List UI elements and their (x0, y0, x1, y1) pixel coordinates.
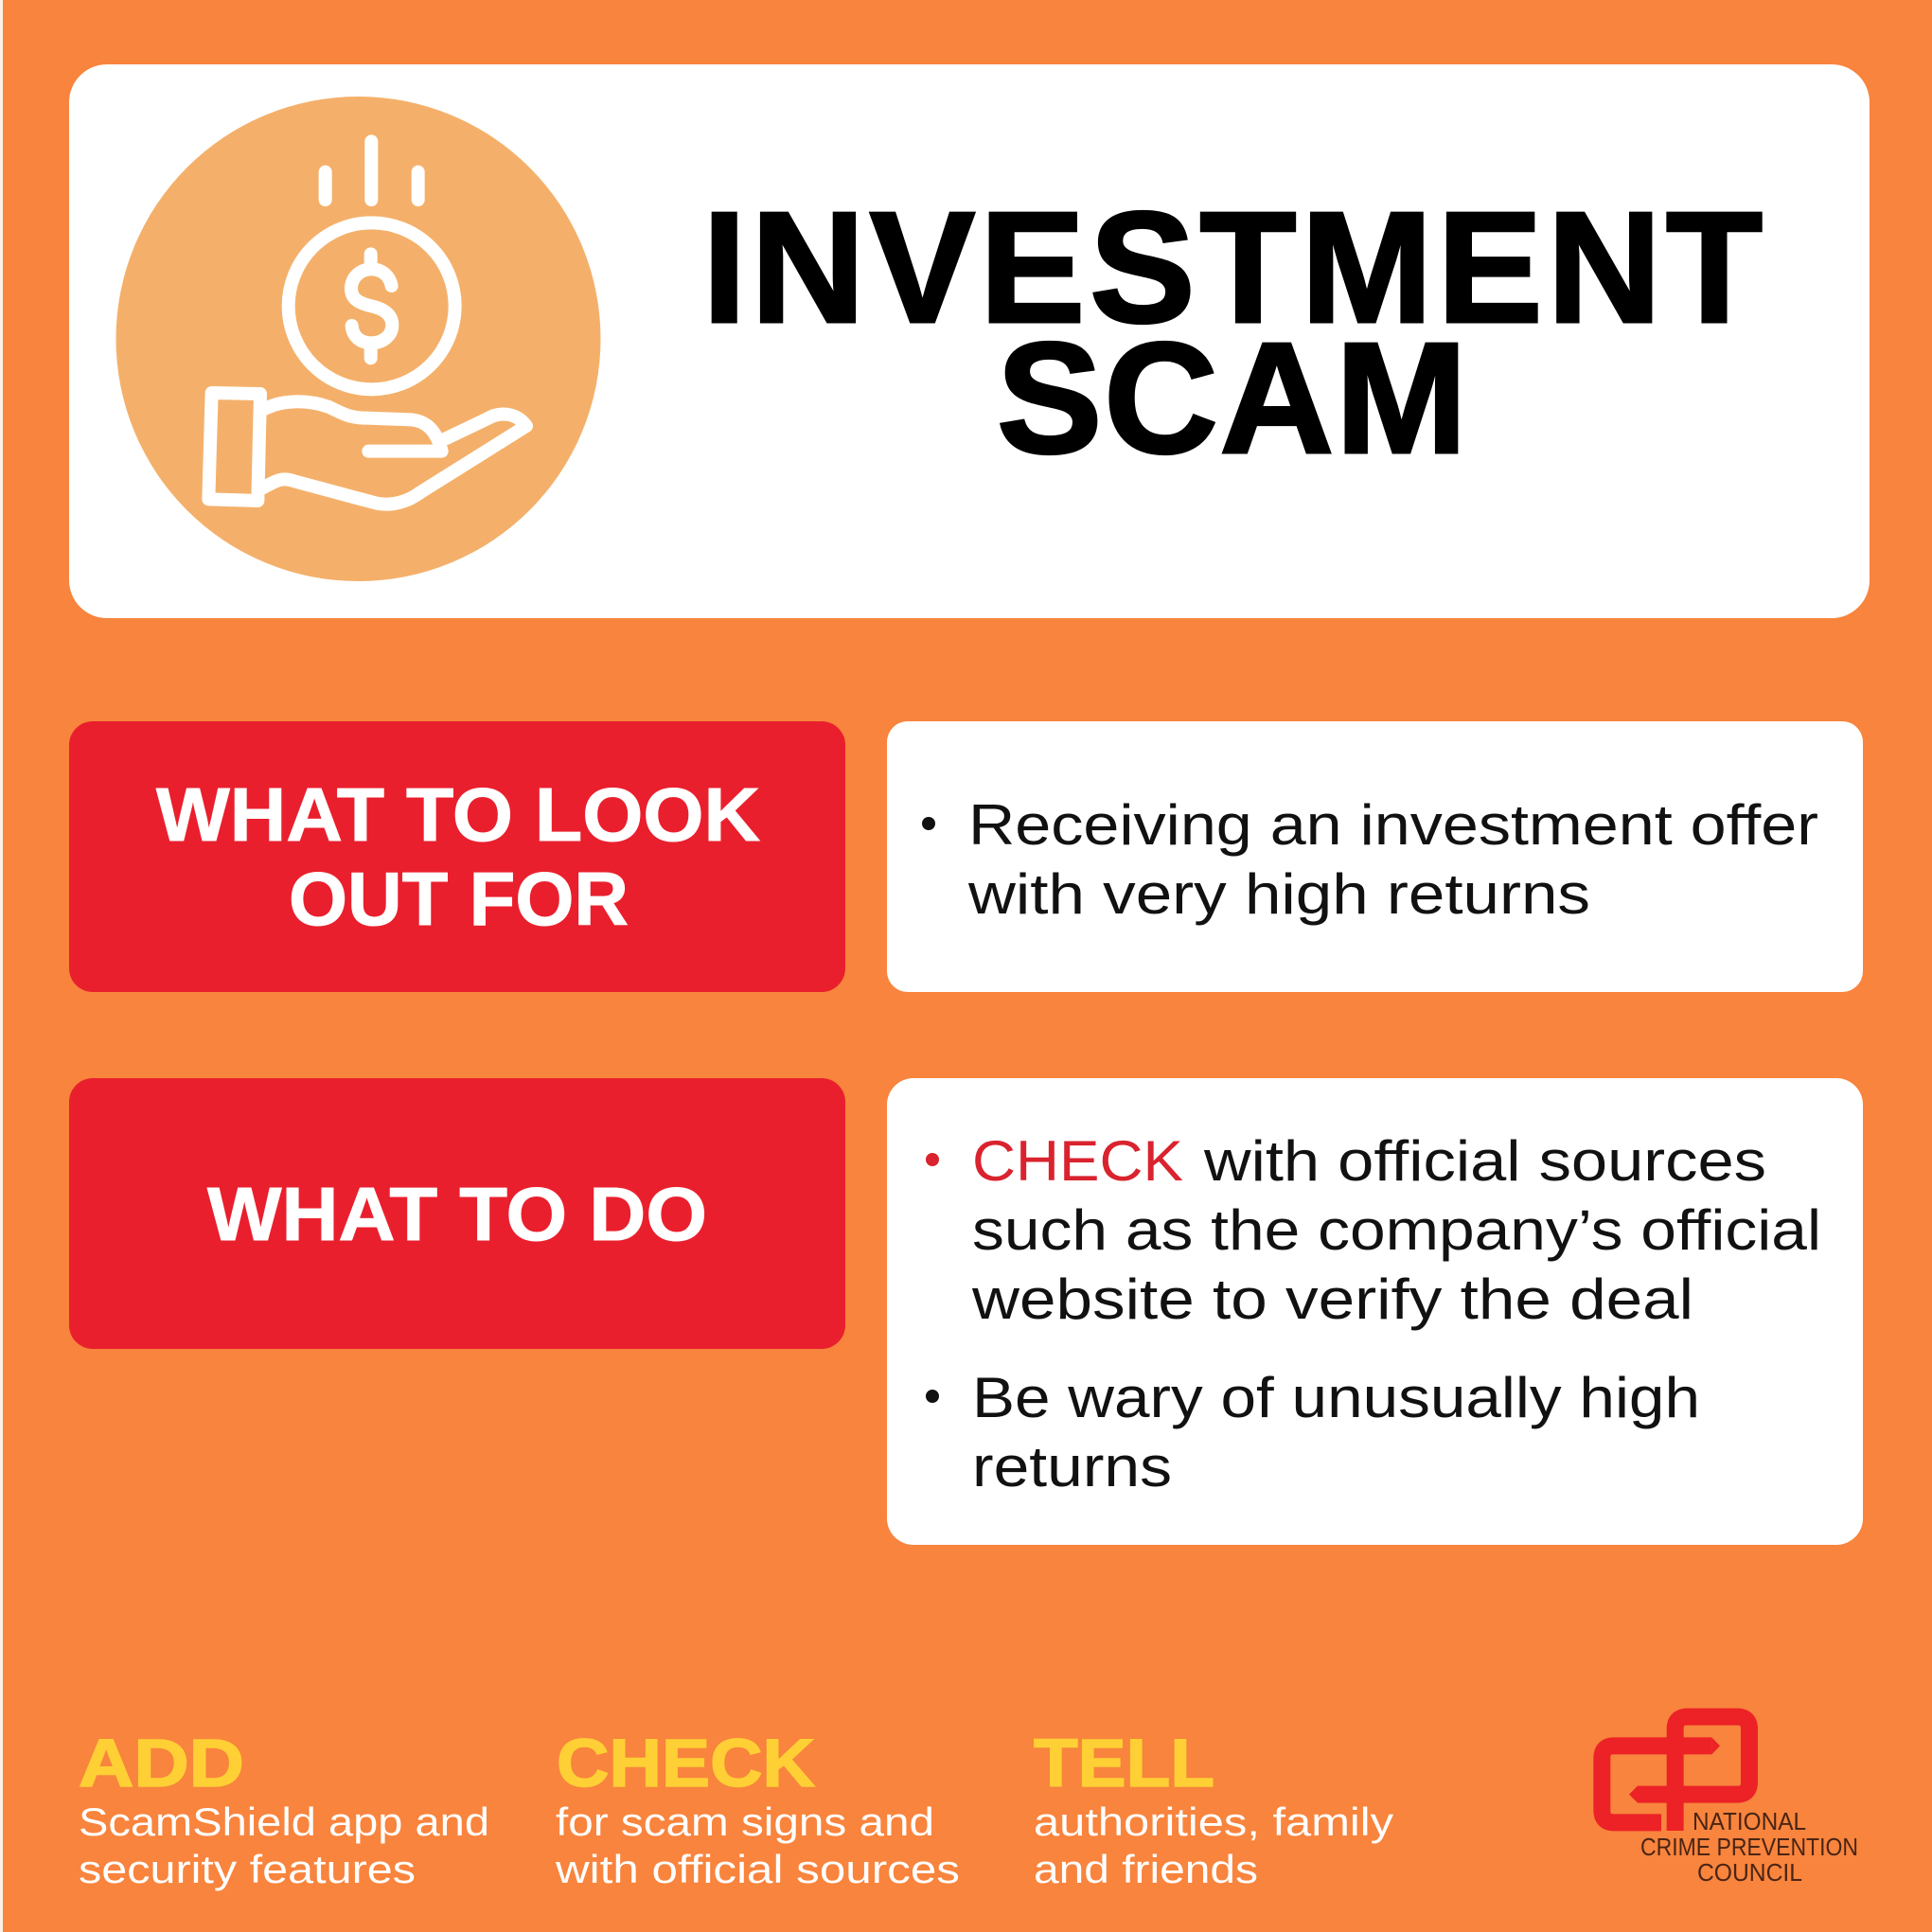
panel: what to look out for content: Receiving an investment offer (968, 793, 1818, 857)
footer: check: CHECK (557, 1727, 815, 1801)
panel: what to look out for label: OUT FOR (289, 857, 629, 941)
footer: tell: and friends (1034, 1847, 1258, 1891)
footer: tell: TELL (1034, 1727, 1214, 1801)
panel: what to do content: with official sources (1203, 1129, 1766, 1193)
footer: check: for scam signs and (556, 1799, 934, 1844)
footer: tell (1034, 1727, 1393, 1891)
footer: check: with official sources (555, 1847, 960, 1891)
footer: add: ScamShield app and (79, 1799, 489, 1844)
panel: header (69, 64, 1870, 618)
logo: National Crime Prevention Council: NATIONAL (1693, 1807, 1806, 1835)
panel: what to do content: Be wary of unusually high (972, 1366, 1700, 1429)
logo: National Crime Prevention Council: COUNCIL (1697, 1858, 1802, 1887)
footer: add: security features (79, 1847, 416, 1891)
panel: what to do label: WHAT TO DO (207, 1172, 707, 1256)
footer: tell: authorities, family (1034, 1799, 1393, 1844)
title: SCAM (997, 310, 1467, 487)
panel: what to look out for content (887, 721, 1863, 992)
panel: what to look out for label: WHAT TO LOOK (156, 772, 760, 857)
icon: interlocking logo mark (1602, 1717, 1749, 1831)
footer: add: ADD (79, 1727, 244, 1801)
footer: add (79, 1727, 489, 1891)
panel: what to do content: returns (972, 1435, 1172, 1498)
title: INVESTMENT (702, 180, 1763, 356)
panel: what to look out for content: with very high returns (967, 862, 1590, 926)
panel: what to do content: CHECK (972, 1129, 1183, 1193)
panel: what to do content (887, 1078, 1863, 1545)
logo: National Crime Prevention Council: CRIME PREVENTION (1640, 1833, 1858, 1861)
footer: check (555, 1727, 960, 1891)
logo: National Crime Prevention Council (1602, 1717, 1858, 1887)
panel: what to look out for label (69, 721, 845, 992)
icon: hand receiving coin (115, 97, 600, 581)
panel: what to do label (69, 1078, 845, 1349)
panel: what to do content: such as the company’s official (972, 1198, 1821, 1262)
title (702, 180, 1763, 487)
panel: what to do content: website to verify the deal (971, 1267, 1693, 1331)
